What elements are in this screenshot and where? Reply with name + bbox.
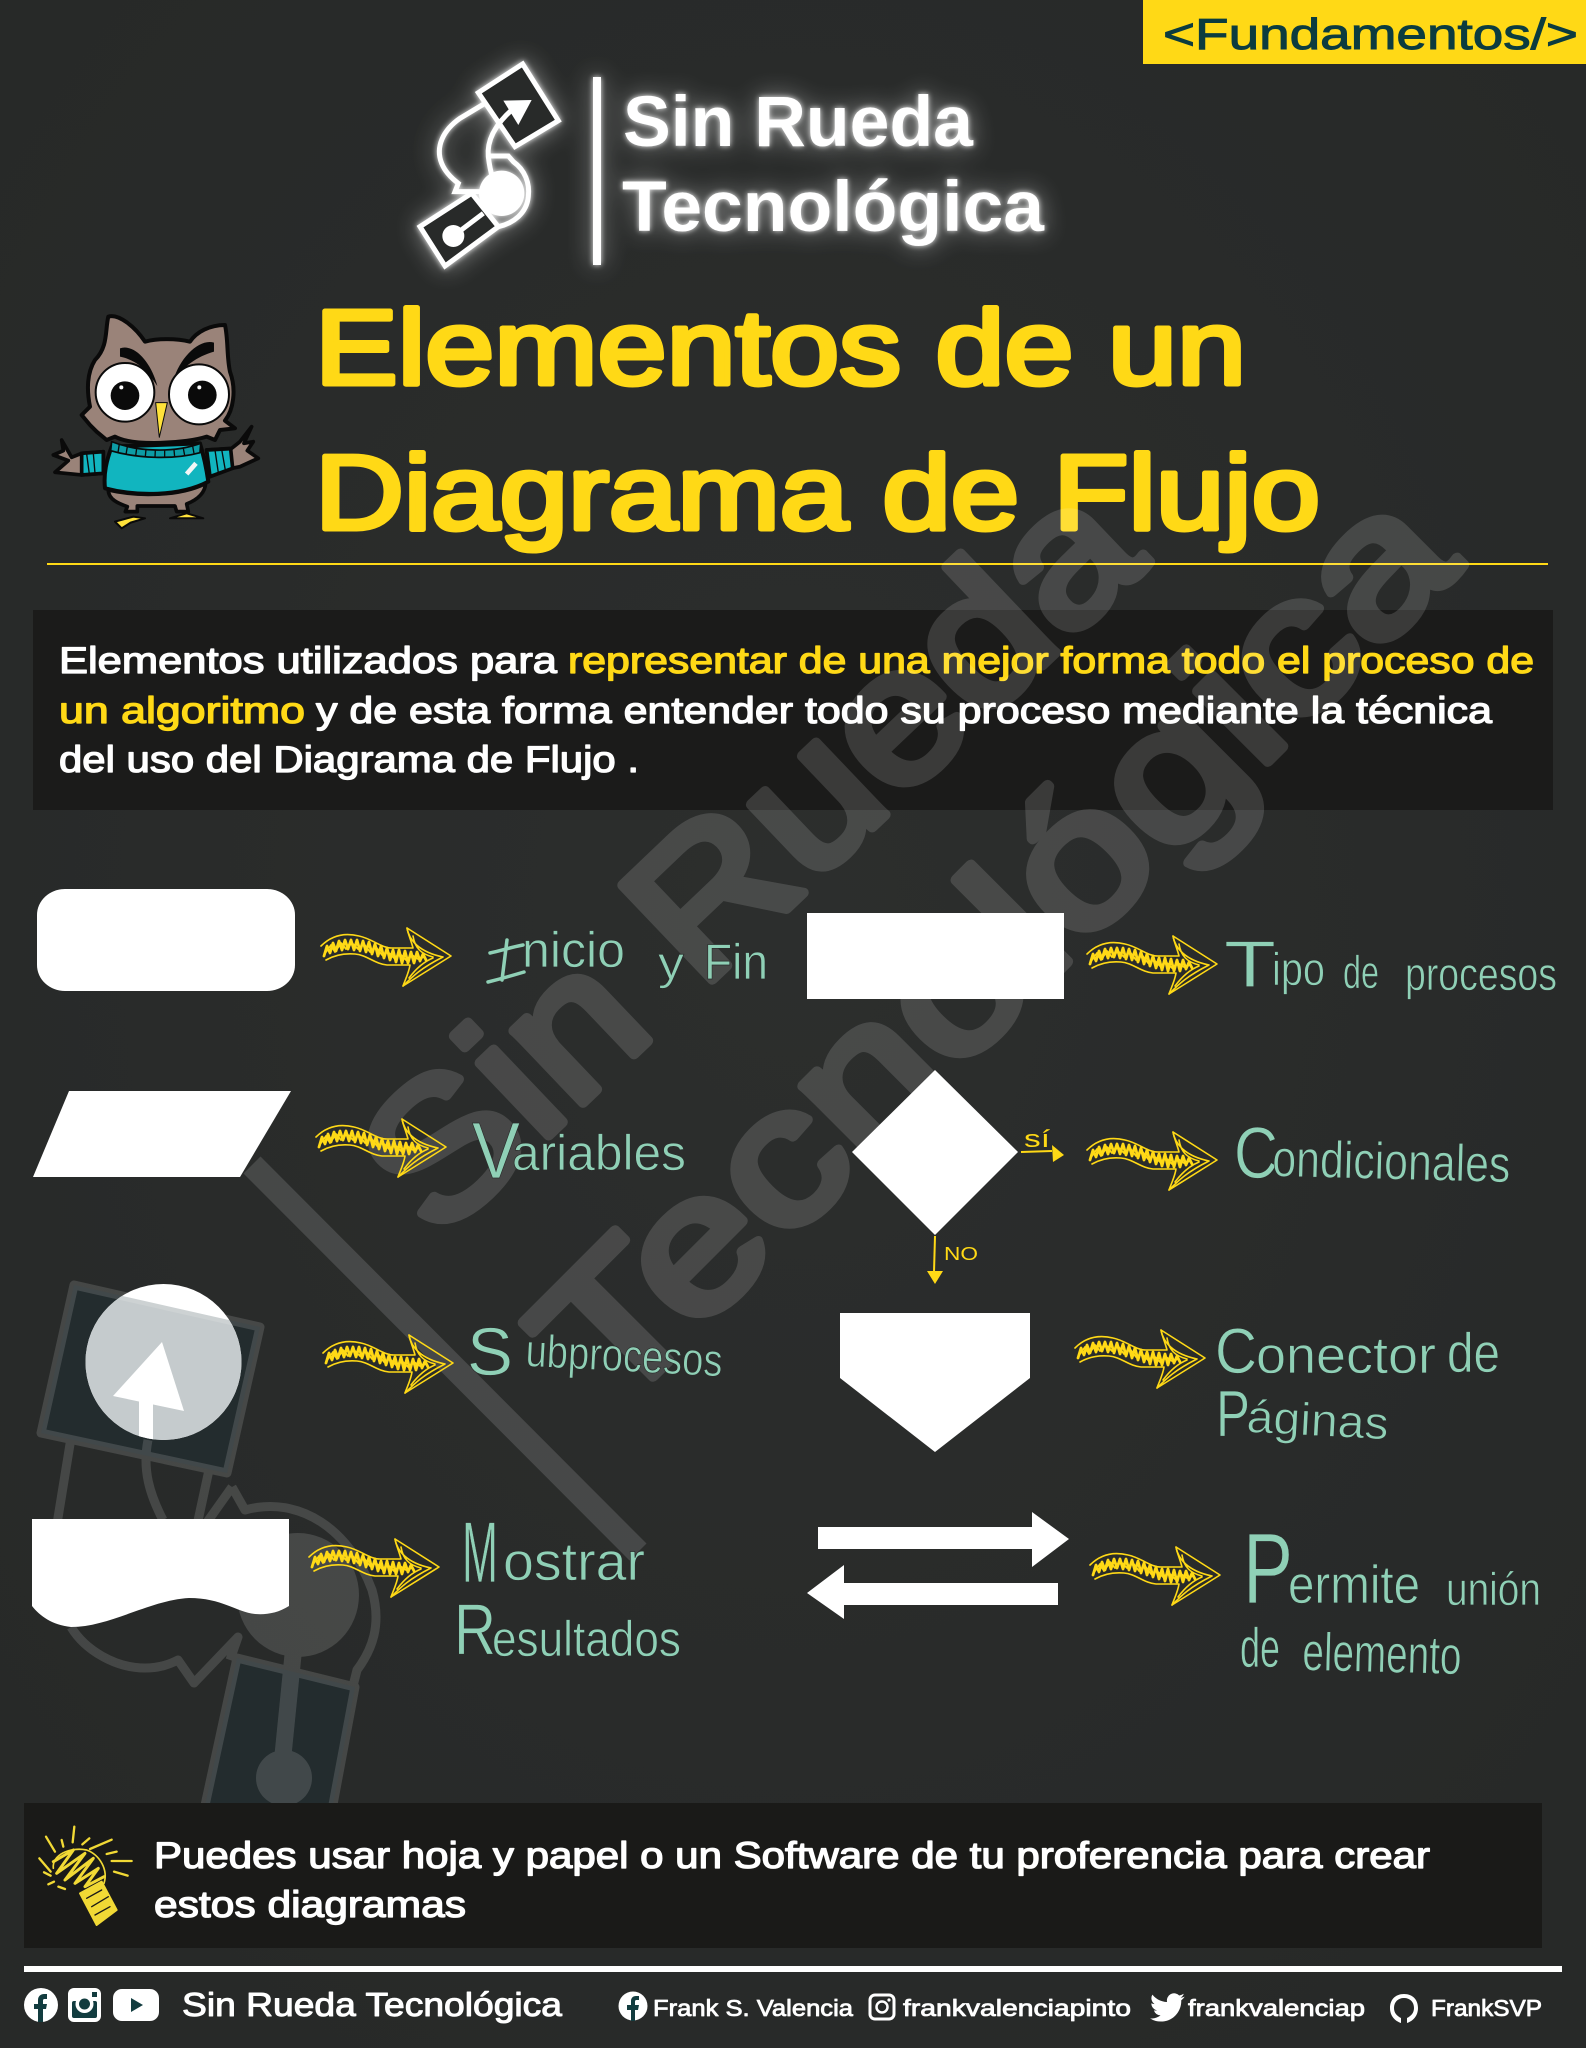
tip text: estos diagramas <box>154 1884 466 1925</box>
footer: FrankSVP <box>1390 1994 1542 2023</box>
label: Permite union de elemento: unión <box>1446 1563 1541 1615</box>
owl head <box>82 316 235 443</box>
footer brand: Sin Rueda Tecnológica <box>182 1986 563 2023</box>
watermark: Sin Rueda Tecnológica: Tecnológica <box>491 445 1493 1447</box>
label: Inicio y Fin: nicio <box>522 922 625 978</box>
title: Diagrama de Flujo <box>315 434 1320 552</box>
label: Mostrar Resultados: esultados <box>492 1611 681 1667</box>
watermark: Sin Rueda Tecnológica: Sin Rueda <box>319 439 1179 1272</box>
panel: intro <box>33 610 1553 810</box>
footer divider <box>24 1966 1562 1972</box>
label: decision No <box>927 1236 978 1284</box>
label: Condicionales: C <box>1234 1114 1278 1194</box>
arrow: condicionales <box>1087 1132 1217 1190</box>
shape: subprocess circle <box>86 1284 242 1440</box>
panel: tip <box>24 1803 1542 1948</box>
badge: Fundamentos: <Fundamentos/> <box>1163 10 1578 59</box>
label: Inicio y Fin: Fin <box>704 934 768 990</box>
label: decision Si: sí <box>1024 1126 1050 1153</box>
footer: frankvalenciapinto: frankvalenciapinto <box>903 1995 1131 2021</box>
arrow: variables <box>316 1119 446 1177</box>
label: Conector de Paginas: áginas <box>1245 1390 1390 1449</box>
owl sweater <box>105 442 208 494</box>
footer: Frank S. Valencia: Frank S. Valencia <box>653 1995 853 2021</box>
logo: Sin Rueda Tecnológica: Sin Rueda <box>623 83 974 162</box>
label: decision No: NO <box>944 1244 978 1264</box>
shape: left arrow <box>807 1565 1058 1619</box>
owl eyes <box>96 363 229 424</box>
label: Subprocesos: ubprocesos <box>524 1324 724 1386</box>
label: Variables <box>472 1106 686 1195</box>
shape: process rectangle <box>807 913 1064 999</box>
label: Tipo de procesos: ipo <box>1272 943 1325 995</box>
logo: Sin Rueda Tecnológica <box>420 64 1045 266</box>
label: Subprocesos <box>467 1314 724 1390</box>
label: Conector de Paginas: onector <box>1256 1327 1436 1385</box>
label: Subprocesos: S <box>467 1314 513 1390</box>
label: Variables: ariables <box>512 1125 686 1181</box>
label: Permite union de elemento: P <box>1243 1513 1293 1625</box>
arrow: permite <box>1090 1547 1220 1605</box>
intro text <box>59 640 1534 780</box>
label: Mostrar Resultados <box>454 1505 681 1670</box>
label: Inicio y Fin <box>488 922 768 990</box>
title: Elementos de un <box>315 289 1246 407</box>
arrow: conector <box>1075 1330 1205 1388</box>
intro text: Elementos utilizados para <box>59 640 557 681</box>
intro text: del uso del Diagrama de Flujo . <box>59 739 639 780</box>
label: Tipo de procesos: T <box>1224 927 1276 1001</box>
label: Tipo de procesos <box>1224 927 1557 1001</box>
label: Conector de Paginas: C <box>1215 1315 1257 1387</box>
arrow: inicio <box>321 928 451 986</box>
owl lower body and feet <box>108 483 206 528</box>
owl mascot <box>53 316 258 528</box>
watermark logo fills <box>41 1285 355 1810</box>
intro text: y de esta forma entender todo su proceso mediante la técnica <box>316 690 1492 731</box>
footer: frankvalenciap: frankvalenciap <box>1188 1995 1365 2021</box>
label: Condicionales <box>1234 1114 1511 1194</box>
badge: Fundamentos <box>1143 0 1586 64</box>
footer: frankvalenciap <box>1150 1993 1365 2022</box>
icon: instagram <box>68 1988 101 2022</box>
label: Permite union de elemento <box>1240 1513 1541 1686</box>
shape: page connector <box>840 1313 1030 1452</box>
label: Variables: V <box>472 1106 521 1195</box>
label: Conector de Paginas: P <box>1216 1376 1250 1450</box>
label: Tipo de procesos: de <box>1343 946 1379 998</box>
label: Permite union de elemento: ermite <box>1288 1555 1420 1615</box>
label: Conector de Paginas: de <box>1447 1321 1500 1384</box>
owl beak <box>156 403 167 437</box>
intro text: un algoritmo <box>59 690 305 731</box>
icon: facebook <box>24 1988 58 2022</box>
logo: Sin Rueda Tecnológica: Tecnológica <box>622 168 1045 247</box>
footer: Frank S. Valencia <box>618 1992 853 2021</box>
shape: terminator <box>37 889 295 991</box>
title <box>315 289 1320 552</box>
label: decision Si <box>1021 1126 1064 1162</box>
owl brows <box>120 342 214 386</box>
icon: flow logo <box>420 64 558 266</box>
label: Inicio y Fin: y <box>658 937 684 989</box>
icon: light bulb <box>39 1827 132 1925</box>
label: Conector de Paginas <box>1215 1315 1500 1450</box>
label: Mostrar Resultados: M <box>462 1505 498 1601</box>
arrow: subprocesos <box>323 1335 453 1393</box>
arrow: mostrar <box>309 1539 439 1597</box>
footer: social icons <box>24 1988 159 2022</box>
icon: youtube <box>113 1989 159 2021</box>
shape: decision diamond <box>852 1070 1018 1235</box>
shape: document <box>32 1519 289 1627</box>
label: Mostrar Resultados: R <box>454 1590 496 1670</box>
intro text: representar de una mejor forma todo el proceso de <box>568 640 1534 681</box>
watermark: Sin Rueda Tecnológica <box>41 439 1493 1810</box>
label: Mostrar Resultados: ostrar <box>503 1532 645 1592</box>
shape: right arrow <box>818 1512 1069 1567</box>
tip text <box>154 1835 1430 1925</box>
arrow: tipo <box>1087 936 1217 994</box>
owl arms <box>53 427 258 477</box>
label: Permite union de elemento: elemento <box>1302 1622 1462 1686</box>
shape: parallelogram <box>33 1091 291 1177</box>
label: Permite union de elemento: de <box>1240 1616 1280 1679</box>
tip text: Puedes usar hoja y papel o un Software de tu proferencia para crear <box>154 1835 1430 1876</box>
footer: FrankSVP: FrankSVP <box>1431 1995 1542 2021</box>
label: Condicionales: ondicionales <box>1272 1130 1511 1194</box>
